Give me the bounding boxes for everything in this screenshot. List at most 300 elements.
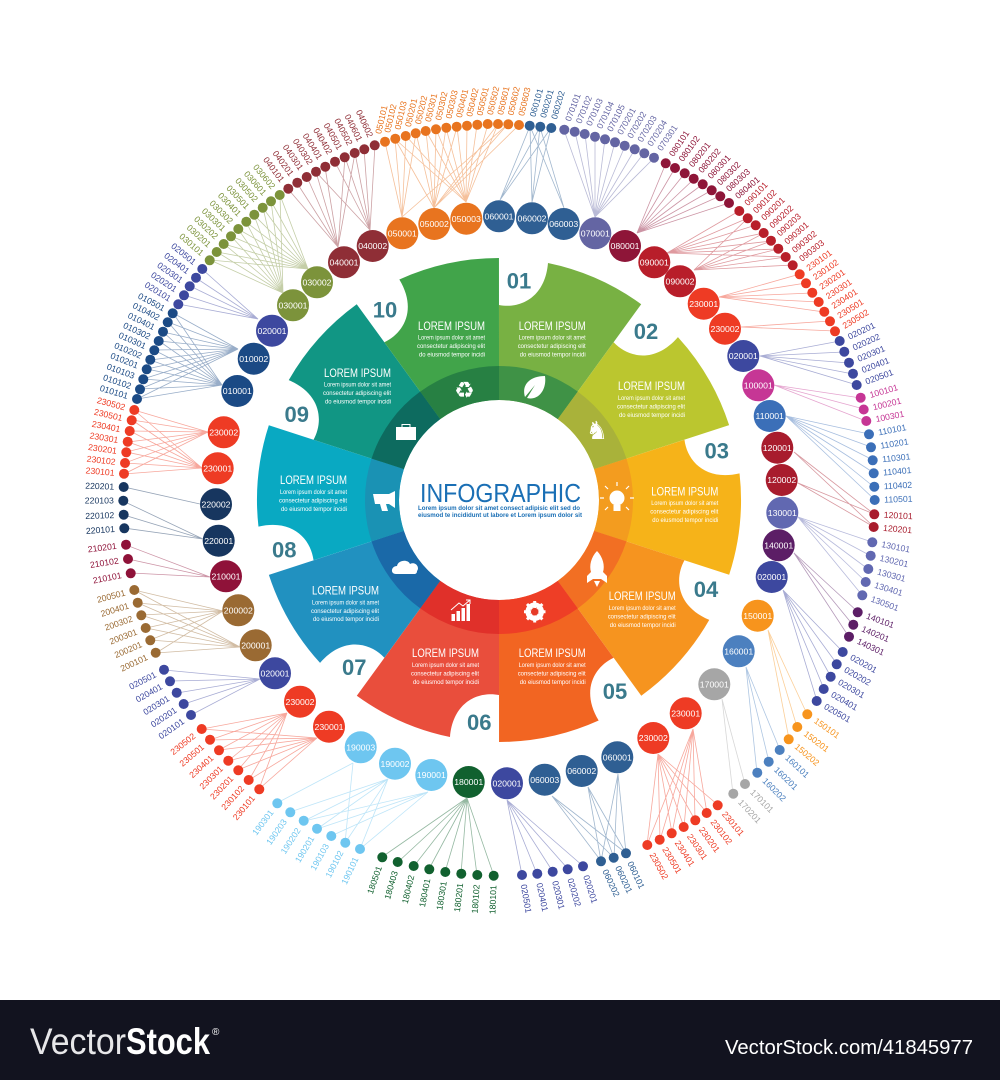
branch: 030 olive nodes: 030101 [177, 231, 206, 258]
branch: 230 red nodes (lower left): 230001 [314, 722, 344, 732]
branch: 080 crimson nodes: 080302 [715, 159, 743, 187]
branch: 100 magenta nodes: 100301 [875, 409, 905, 424]
branch: 060 blue nodes (top): 060001 [484, 212, 514, 222]
branch: 010 dark blue nodes: 010501 [136, 291, 167, 313]
text block 06 [411, 648, 479, 686]
branch: 230 red nodes (lower left): 230301 [197, 764, 225, 791]
branch: 190 light blue nodes: 190203 [264, 817, 289, 847]
branch: 090 red nodes: 090301 [782, 220, 811, 246]
branch: 090 red nodes: 090102 [751, 187, 779, 215]
branch: 230 red nodes (lower right): 230301 [685, 832, 710, 862]
branch: 230 red-orange nodes (upper right) [688, 248, 871, 345]
branch: 200 brown nodes: 200101 [119, 652, 149, 674]
text block 05 [518, 648, 586, 686]
branch: 230 red nodes (left): 230002 [209, 428, 238, 438]
text block 01: LOREM IPSUM [519, 321, 586, 333]
branch: 040 dark red nodes: 040601 [343, 113, 365, 143]
branch: 040 dark red nodes: 040502 [332, 117, 355, 147]
text block 03: do eiusmod tempor incidi [652, 517, 718, 524]
branch: 040 dark red nodes: 040401 [301, 131, 325, 161]
branch: 180 green nodes: 180001 [454, 777, 483, 787]
branch: 160 steel blue nodes: 160001 [724, 646, 753, 656]
branch: 070 purple nodes: 070203 [635, 114, 659, 144]
icon: light bulb [600, 482, 634, 511]
text block 05: LOREM IPSUM [519, 648, 586, 660]
icon: chess knight: ♞ [586, 416, 608, 445]
branch: 010 dark blue nodes: 010401 [126, 310, 157, 332]
branch: 230 red nodes (left): 230101 [85, 465, 115, 478]
icon: cloud [392, 561, 418, 574]
text block 01: Lorem ipsum dolor sit amet [519, 334, 586, 342]
branch: 100 magenta nodes: 100001 [744, 380, 773, 390]
branch: 070 purple nodes [559, 92, 680, 249]
icon: briefcase [396, 424, 416, 440]
branch: 180 green nodes [365, 766, 499, 914]
branch: 050 orange nodes: 050501 [475, 86, 491, 117]
branch: 120 dark red nodes: 120002 [767, 475, 796, 485]
branch: 030 olive nodes: 030202 [192, 214, 220, 241]
branch: 070 purple nodes: 070204 [645, 118, 669, 148]
branch: 050 orange nodes: 050102 [382, 103, 399, 134]
branch: 070 purple nodes: 070201 [615, 106, 638, 136]
branch: 020 indigo nodes (bottom): 020001 [492, 778, 522, 788]
segment 02 [547, 308, 753, 518]
text block 02: Lorem ipsum dolor sit amet [618, 395, 685, 402]
branch: 230 red nodes (lower left): 230401 [187, 753, 215, 780]
branch: 230 red nodes (lower left): 230501 [177, 742, 206, 769]
branch: 220 navy nodes: 220001 [204, 536, 233, 546]
branch: 080 crimson nodes: 080303 [724, 166, 752, 194]
branch: 030 olive nodes: 030602 [251, 162, 278, 191]
text block 07: consectetur adipiscing elit [311, 608, 379, 615]
branch: 020 indigo nodes (upper right): 020001 [729, 351, 758, 361]
footer logo: Vector [30, 1021, 126, 1062]
inner ring sector 10 [420, 345, 515, 435]
branch: 230 red-orange nodes (upper right): 230502 [841, 307, 871, 331]
text block 06: LOREM IPSUM [412, 648, 479, 660]
branch: 030 olive nodes: 030501 [224, 183, 252, 211]
branch: 040 dark red nodes: 040001 [330, 258, 359, 268]
text block 08: Lorem ipsum dolor sit amet [280, 489, 347, 496]
icon: recycle: ♻ [454, 378, 475, 404]
branch: 020 indigo nodes (right): 020201 [849, 652, 879, 675]
branch: 090 red nodes [638, 180, 826, 297]
branch: 090 red nodes: 090302 [790, 229, 819, 255]
text block 09: consectetur adipiscing elit [323, 390, 391, 397]
branch: 020 indigo nodes (upper right): 020202 [851, 331, 882, 352]
branch: 180 green nodes: 180501 [365, 865, 384, 895]
text block 03: Lorem ipsum dolor sit amet [651, 500, 718, 507]
text block 09 [323, 368, 391, 406]
branch: 020 indigo nodes (bottom) [491, 767, 600, 914]
branch: 130 periwinkle nodes: 130301 [876, 567, 907, 584]
branch: 020 indigo nodes (lower left): 020201 [149, 705, 179, 729]
branch: 100 magenta nodes: 100101 [868, 382, 899, 400]
branch: 010 dark blue nodes: 010201 [109, 351, 140, 371]
branch: 070 purple nodes: 070103 [584, 97, 605, 127]
text block 04 [608, 591, 676, 629]
branch: 010 dark blue nodes: 010202 [113, 340, 144, 361]
text block 08 [279, 475, 347, 513]
branch: 020 indigo nodes (bottom): 020401 [534, 882, 550, 913]
segment numbers: 01 [507, 268, 531, 294]
branch: 040 dark red nodes: 040501 [322, 121, 345, 152]
branch: 060 blue nodes (bottom) [529, 741, 647, 898]
footer image id: VectorStock.com/41845977 [725, 1037, 973, 1059]
branch: 150 amber nodes: 150202 [793, 742, 822, 768]
branch: 230 red nodes (left) [85, 395, 240, 484]
branch: 180 green nodes: 180401 [417, 878, 432, 908]
branch: 190 light blue nodes: 190001 [417, 770, 446, 780]
text block 02 [617, 381, 685, 419]
branch: 020 indigo nodes (lower left): 020401 [134, 681, 164, 704]
branch: 030 olive nodes: 030001 [278, 300, 308, 310]
branch: 020 indigo nodes (right) [756, 561, 879, 725]
branch: 020 indigo nodes (upper left): 020401 [162, 251, 192, 276]
branch: 230 red nodes (left): 230201 [87, 442, 118, 456]
inner ring sector 06 [420, 581, 499, 634]
branch: 190 light blue nodes: 190301 [250, 808, 276, 837]
text block 06: do eiusmod tempor incidi [413, 679, 479, 686]
branch: 030 olive nodes: 030302 [208, 198, 235, 226]
branch: 210 crimson nodes [87, 540, 242, 592]
branch: 040 dark red nodes: 040602 [354, 108, 375, 139]
branch: 020 indigo nodes (right): 020501 [822, 701, 853, 725]
branch: 230 red-orange nodes (upper right): 230301 [824, 277, 854, 301]
branch: 050 orange nodes [373, 85, 533, 249]
branch: 090 red nodes: 090202 [767, 203, 795, 230]
branch: 200 brown nodes: 200201 [113, 639, 144, 660]
branch: 220 navy nodes: 220101 [86, 524, 115, 536]
segment numbers [272, 268, 729, 735]
branch: 010 dark blue nodes [99, 291, 270, 407]
branch: 230 red nodes (lower right) [637, 697, 746, 881]
branch: 170 grey nodes [698, 668, 776, 825]
title: INFOGRAPHIC [420, 478, 581, 508]
branch: 220 navy nodes: 220103 [85, 496, 114, 506]
footer bar [0, 1000, 1000, 1080]
inner ring sector 08 [347, 450, 422, 541]
branch: 230 red nodes (left): 230301 [89, 430, 119, 445]
inner ring sector 04 [552, 525, 626, 616]
branch: 010 dark blue nodes: 010301 [117, 330, 148, 351]
text block 03: LOREM IPSUM [651, 486, 718, 498]
footer logo: Stock [126, 1021, 210, 1062]
branch: 100 magenta nodes: 100201 [872, 396, 902, 412]
branch: 010 dark blue nodes: 010001 [223, 386, 252, 396]
branch: 200 brown nodes [96, 585, 272, 674]
branch: 180 green nodes: 180101 [487, 885, 498, 914]
branch: 230 red nodes (lower left): 230201 [208, 774, 235, 801]
branch: 210 crimson nodes: 210102 [89, 556, 120, 570]
branch: 230 red nodes (lower right): 230201 [697, 825, 722, 855]
branch: 230 red nodes (lower right): 230401 [673, 839, 697, 868]
branch: 040 dark red nodes: 040201 [271, 149, 296, 178]
branch: 020 indigo nodes (right): 020001 [757, 572, 786, 582]
icon: gear [524, 601, 546, 622]
branch: 150 amber nodes: 150201 [802, 729, 831, 754]
text block 04: Lorem ipsum dolor sit amet [609, 605, 676, 612]
branch: 020 indigo nodes (upper right): 020201 [846, 320, 877, 342]
branch: 050 orange nodes: 050601 [495, 85, 512, 116]
subtitle: eiusmod te incididunt ut labore et Lorem ipsum dolor sit [418, 512, 583, 519]
branch: 230 red nodes (left): 230401 [91, 419, 121, 434]
central segmented wheel [230, 225, 768, 775]
branch: 100 magenta nodes [742, 369, 905, 426]
text block 07 [311, 586, 379, 623]
branch: 200 brown nodes: 200301 [108, 627, 139, 646]
branch: 180 green nodes: 180102 [470, 884, 482, 914]
branch: 110 blue nodes: 110101 [877, 422, 907, 437]
branch: 020 indigo nodes (upper left) [143, 241, 288, 347]
branch: 170 grey nodes: 170101 [748, 787, 776, 815]
branch: 230 red nodes (left): 230501 [93, 407, 124, 423]
branch: 190 light blue nodes: 190103 [308, 842, 331, 872]
branch: 070 purple nodes: 070202 [625, 110, 648, 140]
branch: 060 blue nodes (bottom): 060202 [600, 868, 622, 898]
branch: 090 red nodes: 090201 [759, 195, 787, 222]
branch: 050 orange nodes: 050101 [373, 104, 390, 135]
branch: 140 violet nodes: 140001 [764, 540, 793, 550]
segment numbers: 03 [704, 438, 729, 464]
text block 04: LOREM IPSUM [609, 591, 676, 603]
text block 03 [650, 486, 718, 524]
branch: 220 navy nodes: 220002 [202, 500, 231, 510]
branch: 190 light blue nodes: 190002 [380, 759, 410, 769]
icon: rocket [587, 551, 607, 587]
branch: 020 indigo nodes (bottom): 020301 [550, 880, 567, 910]
branch: 230 red-orange nodes (upper right): 230401 [830, 286, 859, 311]
branch: 020 indigo nodes (bottom): 020202 [566, 877, 583, 908]
branch: 060 blue nodes (top): 060202 [549, 89, 567, 120]
branch: 230 red nodes (lower right): 230002 [639, 733, 668, 743]
text block 07: Lorem ipsum dolor sit amet [312, 600, 379, 606]
text block 10: LOREM IPSUM [418, 321, 485, 333]
branch: 110 blue nodes [754, 400, 913, 505]
icon: megaphone [373, 491, 395, 511]
branch: 080 crimson nodes: 080102 [677, 134, 702, 163]
branch: 140 violet nodes: 140201 [860, 624, 891, 644]
text block 10 [417, 321, 485, 358]
branch: 040 dark red nodes: 040301 [281, 142, 306, 172]
inner ring sector 02 [547, 392, 642, 481]
branch: 070 purple nodes: 070101 [563, 92, 583, 123]
inner ring sector 01 [499, 366, 578, 419]
branch: 090 red nodes: 090001 [640, 258, 669, 268]
branch: 050 orange nodes: 050402 [464, 87, 481, 118]
text block 04: do eiusmod tempor incidi [610, 622, 676, 629]
branch: 230 red nodes (left): 230102 [86, 454, 116, 467]
branch: 060 blue nodes (bottom): 060002 [567, 766, 596, 776]
branch: 230 red-orange nodes (upper right): 230002 [710, 324, 740, 334]
branch: 020 indigo nodes (right): 020202 [843, 665, 873, 688]
branch: 050 orange nodes: 050603 [516, 86, 533, 117]
text block 08: consectetur adipiscing elit [279, 498, 347, 504]
branch: 230 red nodes (lower left) [168, 686, 345, 822]
branch: 080 crimson nodes: 080101 [667, 128, 691, 158]
branch: 120 dark red nodes: 120201 [883, 523, 913, 535]
branch: 020 indigo nodes (upper left): 020101 [143, 280, 173, 304]
branch: 110 blue nodes: 110201 [880, 436, 909, 451]
branch: 050 orange nodes: 050201 [403, 97, 419, 128]
branch: 230 red-orange nodes (upper right): 230102 [811, 257, 841, 282]
text block 02: consectetur adipiscing elit [617, 404, 685, 410]
branch: 230 red nodes (lower right): 230001 [671, 708, 700, 718]
branch: 230 red nodes (lower left): 230101 [231, 793, 257, 822]
inner ring sector 07 [356, 519, 451, 608]
branch: 010 dark blue nodes: 010101 [99, 383, 130, 401]
title [418, 478, 583, 519]
branch: 050 orange nodes: 050303 [444, 89, 460, 120]
segment 03 [576, 427, 768, 610]
branch: 070 purple nodes: 070001 [581, 228, 610, 238]
branch: 160 steel blue nodes [723, 635, 811, 804]
branch: 060 blue nodes (bottom): 060001 [603, 752, 632, 762]
branch: 230 red nodes (lower left): 230502 [168, 731, 198, 757]
segment numbers: 09 [284, 402, 309, 427]
subtitle: Lorem ipsum dolor sit amet consect adipisic elit sed do [418, 505, 580, 512]
text block 06: consectetur adipiscing elit [411, 670, 479, 678]
branch: 010 dark blue nodes: 010103 [105, 361, 136, 381]
branch: 190 light blue nodes: 190102 [323, 849, 346, 879]
branch: 070 purple nodes: 070105 [605, 103, 627, 133]
branch: 030 olive nodes: 030601 [242, 169, 269, 198]
text block 06: Lorem ipsum dolor sit amet [412, 662, 479, 669]
branch: 030 olive nodes: 030502 [233, 176, 260, 204]
branch: 140 violet nodes: 140301 [855, 636, 886, 658]
branch: 200 brown nodes: 200401 [99, 601, 130, 619]
text block 02: LOREM IPSUM [618, 381, 685, 393]
text block 08: do eiusmod tempor incidi [281, 506, 347, 513]
branch: 200 brown nodes: 200501 [96, 588, 127, 605]
branch: 030 olive nodes: 030401 [216, 191, 243, 218]
branch: 230 red nodes (lower right): 230102 [709, 817, 734, 847]
branch: 090 red nodes: 090203 [775, 211, 803, 238]
text block 10: consectetur adipiscing elit [417, 343, 485, 350]
text block 09: Lorem ipsum dolor sit amet [324, 382, 391, 388]
branch: 230 red nodes (lower right): 230101 [720, 809, 746, 838]
branch: 160 steel blue nodes: 160101 [783, 753, 811, 780]
branch: 020 indigo nodes (upper right): 020401 [860, 355, 891, 375]
branch: 060 blue nodes (top): 060101 [528, 87, 545, 118]
branch: 210 crimson nodes: 210001 [212, 572, 241, 582]
segment 05 [432, 565, 638, 775]
branch: 020 indigo nodes (upper right): 020501 [864, 367, 895, 386]
branch: 140 violet nodes [763, 529, 896, 658]
branch: 040 dark red nodes [261, 108, 389, 278]
text block 03: consectetur adipiscing elit [650, 508, 718, 516]
branch: 230 red-orange nodes (upper right): 230101 [804, 248, 834, 273]
branch: 220 navy nodes: 220102 [85, 510, 115, 521]
branch: 060 blue nodes (top): 060201 [538, 88, 556, 119]
branch: 210 crimson nodes: 210201 [87, 541, 117, 554]
branch: 020 indigo nodes (upper left): 020501 [169, 241, 198, 267]
segment numbers: 08 [272, 538, 297, 562]
branch: 010 dark blue nodes: 010402 [131, 300, 162, 323]
branch: 060 blue nodes (top): 060003 [549, 219, 578, 229]
branch: 080 crimson nodes: 080001 [610, 241, 640, 251]
branch: 040 dark red nodes: 040302 [291, 137, 315, 167]
branch: 040 dark red nodes: 040101 [261, 155, 287, 184]
text block 09: LOREM IPSUM [324, 368, 391, 380]
branch: 230 red nodes (lower left): 230002 [286, 697, 315, 707]
branch: 020 indigo nodes (lower left): 020501 [127, 669, 158, 692]
branch: 020 indigo nodes (lower left): 020001 [260, 668, 290, 678]
branch: 150 amber nodes: 150001 [743, 611, 772, 621]
text block 07: LOREM IPSUM [312, 586, 379, 598]
text block 07: do eiusmod tempor incidi [313, 616, 379, 623]
text block 01: consectetur adipiscing elit [518, 343, 586, 350]
branch: 190 light blue nodes: 190101 [339, 855, 361, 886]
branch: 060 blue nodes (bottom): 060101 [625, 860, 647, 890]
text block 01: do eiusmod tempor incidi [520, 352, 586, 358]
branch: 130 periwinkle nodes: 130401 [873, 580, 904, 598]
branch: 020 indigo nodes (lower left): 020101 [157, 716, 186, 741]
branch: 030 olive nodes [177, 162, 333, 321]
branch: 220 navy nodes [85, 481, 235, 557]
branch: 210 crimson nodes: 210101 [92, 570, 122, 586]
branch: 200 brown nodes: 200002 [224, 606, 253, 616]
branch: 230 red-orange nodes (upper right): 230501 [835, 297, 865, 321]
text block 04: consectetur adipiscing elit [608, 614, 676, 620]
branch: 160 steel blue nodes: 160202 [760, 776, 788, 804]
branch: 230 red-orange nodes (upper right): 230201 [817, 267, 847, 292]
branch: 120 dark red nodes: 120001 [763, 443, 792, 453]
branch: 030 olive nodes: 030002 [302, 278, 332, 288]
branch: 020 indigo nodes (upper left): 020001 [258, 326, 287, 336]
text block 01 [518, 321, 586, 358]
icon: leaf [524, 376, 545, 398]
branch: 020 indigo nodes (upper left): 020201 [149, 270, 179, 294]
branch: 200 brown nodes: 200302 [103, 614, 134, 633]
segment 01 [499, 263, 641, 419]
branch: 160 steel blue nodes: 160201 [772, 765, 800, 792]
branch: 020 indigo nodes (lower left): 020301 [141, 693, 171, 717]
branch: 110 blue nodes: 110501 [884, 494, 913, 505]
footer logo [30, 1021, 220, 1062]
branch: 020 indigo nodes (right): 020401 [829, 689, 860, 713]
branch: 170 grey nodes: 170201 [736, 797, 763, 825]
inner ring sector 03 [576, 459, 651, 550]
branch: 230 red nodes (left): 230001 [203, 464, 232, 474]
branch: 020 indigo nodes (upper left): 020301 [155, 260, 185, 285]
footer logo: ® [212, 1027, 220, 1038]
branch: 180 green nodes: 180402 [400, 874, 416, 905]
segment numbers: 02 [634, 319, 658, 344]
subtitle [418, 505, 583, 519]
branch: 130 periwinkle nodes: 130001 [768, 508, 797, 518]
branch: 230 red nodes (left): 230502 [96, 395, 127, 412]
branch: 190 light blue nodes: 190003 [346, 742, 375, 752]
segment 10 [360, 225, 566, 435]
branch: 180 green nodes: 180301 [434, 880, 449, 911]
branch: 170 grey nodes: 170001 [700, 680, 729, 690]
branch: 020 indigo nodes (bottom): 020201 [581, 874, 600, 905]
branch: 220 navy nodes: 220201 [85, 481, 115, 492]
text block 10: Lorem ipsum dolor sit amet [418, 334, 485, 342]
branch: 050 orange nodes: 050401 [454, 88, 470, 119]
branch: 050 orange nodes: 050103 [393, 100, 409, 131]
branch: 200 brown nodes: 200001 [241, 640, 270, 650]
branch: 080 crimson nodes [609, 128, 762, 262]
text block 02: do eiusmod tempor incidi [619, 412, 685, 419]
branch: 080 crimson nodes: 080301 [706, 153, 733, 181]
branch: 190 light blue nodes: 190202 [279, 826, 303, 856]
segment 07 [245, 482, 451, 692]
branch: 130 periwinkle nodes [766, 497, 911, 613]
branch: 020 indigo nodes (bottom): 020501 [519, 883, 534, 914]
branch: 230 red nodes (lower right): 230501 [660, 845, 684, 875]
